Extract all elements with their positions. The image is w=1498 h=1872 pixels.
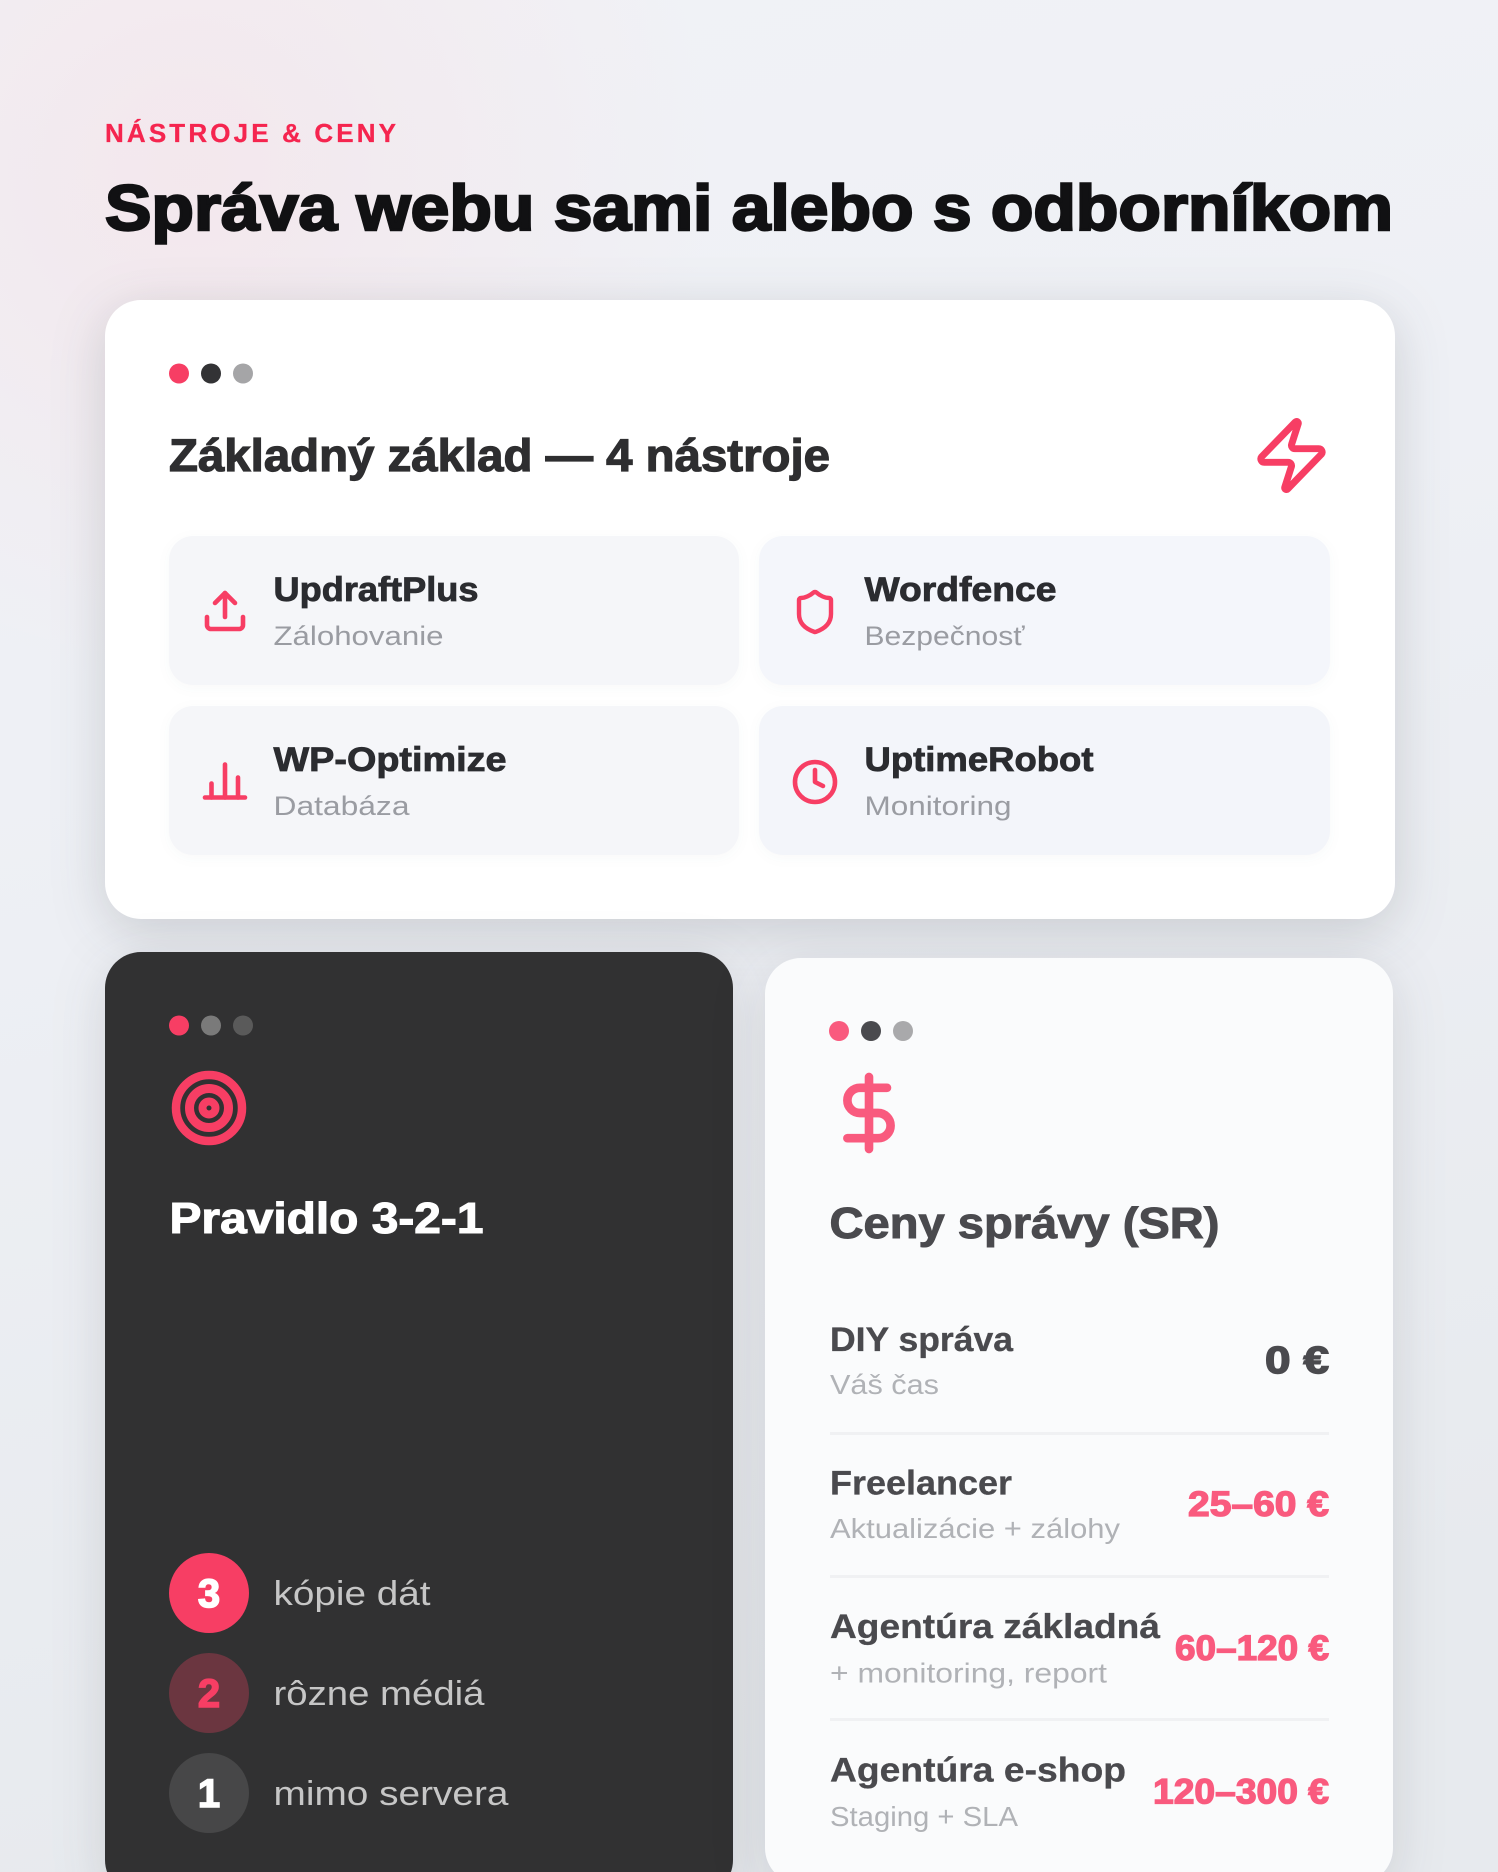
icon: bar chart — [205, 764, 245, 798]
rule item: 1 offsite: mimo servera — [274, 1775, 509, 1813]
icon: upload — [207, 593, 243, 629]
panel heading: Ceny správy (SR) — [830, 1199, 1220, 1248]
tool name: UptimeRobot — [864, 741, 1094, 779]
price row: DIY — [830, 1321, 1329, 1400]
window dots — [829, 1021, 913, 1041]
tool role: Databáza — [274, 791, 411, 821]
tool card: UptimeRobot — [759, 706, 1330, 855]
rule item: 1 offsite — [169, 1753, 509, 1833]
eyebrow label: NÁSTROJE & CENY — [105, 118, 396, 148]
icon: clock — [795, 762, 835, 802]
tool role: Monitoring — [864, 791, 1012, 821]
tool role: Zálohovanie — [274, 621, 444, 651]
tool role: Bezpečnosť — [864, 621, 1025, 651]
icon: target — [176, 1075, 242, 1141]
price row: e-shop agency — [830, 1752, 1329, 1832]
rule item: 3 copies: kópie dát — [274, 1575, 431, 1613]
icon: dollar sign — [847, 1077, 891, 1149]
rule item: 2 media: rôzne médiá — [274, 1675, 485, 1713]
price row: e-shop agency: Staging + SLA — [830, 1801, 1018, 1832]
tool card: UpdraftPlus — [169, 536, 739, 685]
tool name: WP-Optimize — [274, 741, 506, 779]
price row: e-shop agency: Agentúra e-shop — [830, 1752, 1126, 1790]
price row: Freelancer — [830, 1464, 1329, 1544]
icon: lightning bolt — [1261, 421, 1322, 490]
panel heading: Pravidlo 3-2-1 — [170, 1194, 484, 1243]
tool name: Wordfence — [864, 571, 1056, 609]
tool name: UpdraftPlus — [274, 571, 478, 609]
panel: 3-2-1 rule — [105, 952, 733, 1872]
price row: Freelancer: Aktualizácie + zálohy — [830, 1513, 1120, 1544]
window dots — [169, 364, 253, 384]
tool card: Wordfence — [759, 536, 1330, 685]
price row: basic agency — [830, 1608, 1329, 1688]
panel: prices — [765, 958, 1393, 1872]
panel: basic tools — [105, 300, 1395, 919]
price row: DIY: Váš čas — [830, 1369, 939, 1400]
panel heading: Základný základ — 4 nástroje — [169, 430, 830, 481]
tool card: WP-Optimize — [169, 706, 739, 855]
rule item: 1 offsite: 1 — [198, 1772, 220, 1816]
price row: DIY: DIY správa — [830, 1321, 1014, 1359]
rule item: 3 copies: 3 — [198, 1572, 220, 1616]
price row: Freelancer: Freelancer — [830, 1464, 1012, 1502]
price row: e-shop agency: 120–300 € — [1153, 1772, 1329, 1812]
price row: basic agency: 60–120 € — [1175, 1629, 1329, 1668]
rule item: 2 media — [169, 1653, 485, 1733]
window dots — [169, 1016, 253, 1036]
price row: Freelancer: 25–60 € — [1188, 1485, 1329, 1524]
price row: basic agency: Agentúra základná — [830, 1608, 1160, 1646]
icon: shield — [799, 592, 831, 632]
price row: DIY: 0 € — [1265, 1340, 1329, 1382]
rule item: 2 media: 2 — [198, 1672, 220, 1716]
price row: basic agency: + monitoring, report — [830, 1658, 1107, 1688]
rule item: 3 copies — [169, 1553, 431, 1633]
title: Správa webu sami alebo s odborníkom — [105, 172, 1393, 244]
